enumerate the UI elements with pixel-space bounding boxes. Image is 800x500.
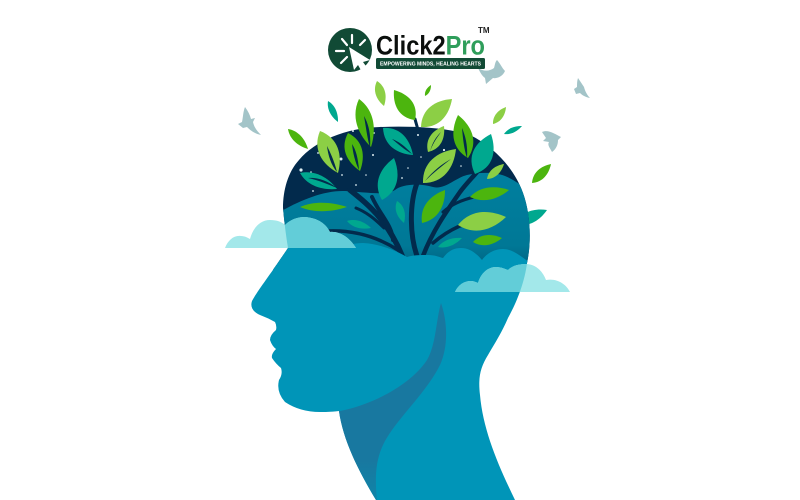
bird top [478,60,505,84]
bird right [542,131,561,152]
birds [238,60,590,152]
logo icon: cursor click [328,28,372,72]
head foreground face and neck [240,243,540,500]
leaf group: light green [311,80,509,234]
leaf group: green [285,84,554,247]
cloud: right [455,264,570,292]
cloud overlap with head [455,264,527,292]
neck shadow [330,303,446,500]
stars [299,130,462,192]
inner teal area [270,173,535,270]
tagline bar [376,58,485,69]
head back: night sky and inner teal [273,126,530,270]
illustration: head with tree of leaves [225,27,590,500]
bird far right [574,78,590,98]
branches [328,119,490,258]
tagline bar: EMPOWERING MINDS, HEALING HEARTS [380,62,481,68]
cloud: left [225,217,356,248]
leaf group: teal [297,100,523,250]
trademark: TM [478,26,490,35]
logo wordmark: Click2Pro [376,30,485,60]
leaves [285,80,554,250]
leaf behind head [513,205,549,229]
bird left [238,107,261,135]
leaf midribs [308,116,467,188]
cloud overlap with head [284,217,356,248]
logo [328,26,490,72]
